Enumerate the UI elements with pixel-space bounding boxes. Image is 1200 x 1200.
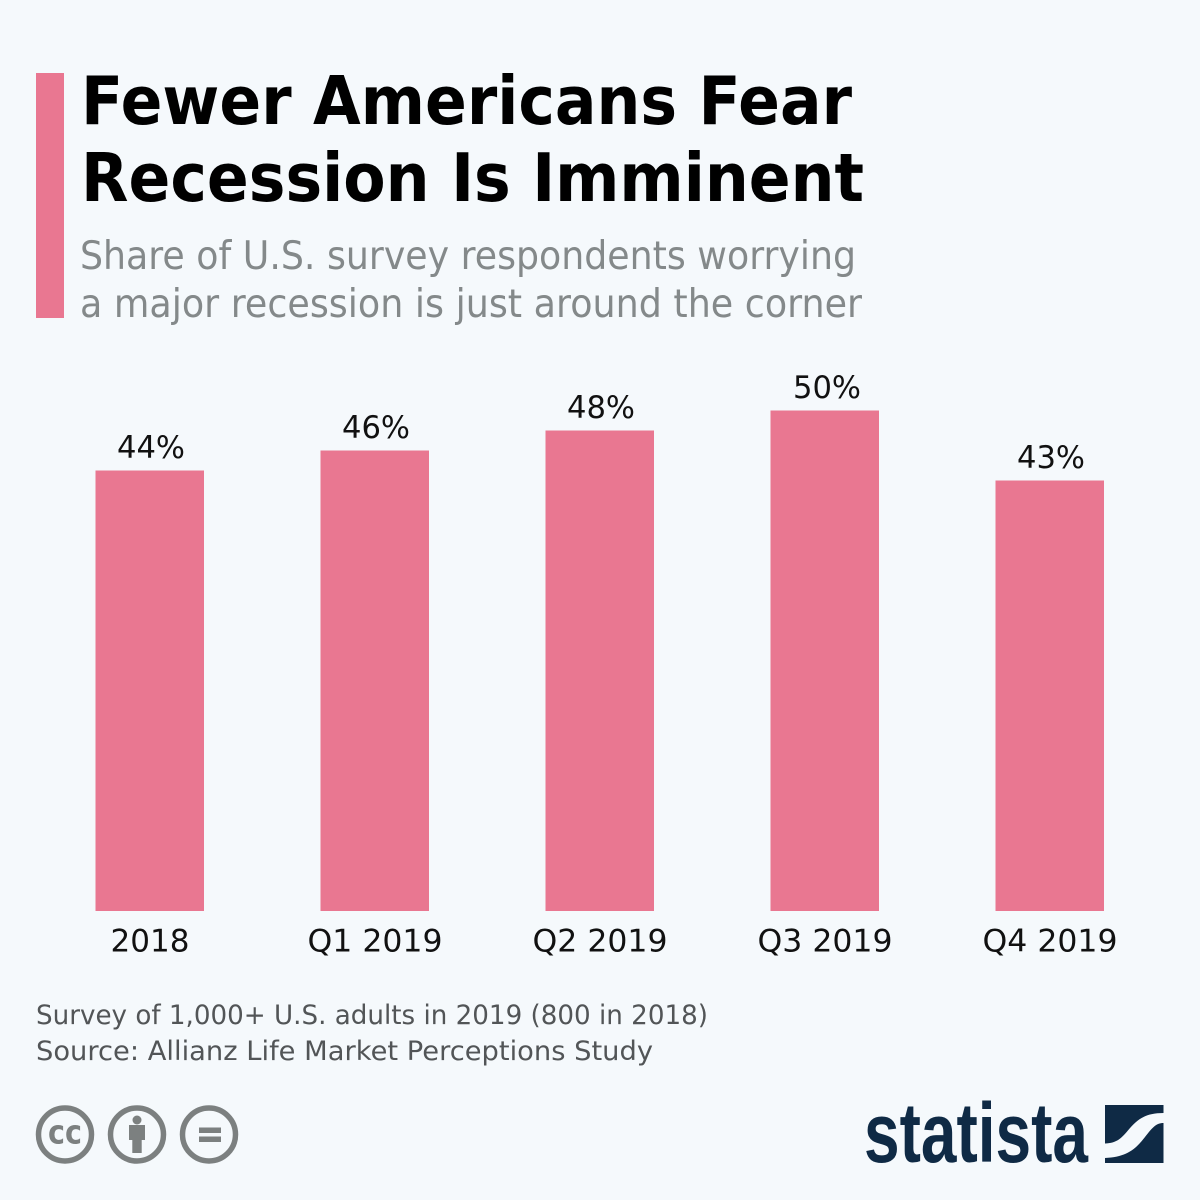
value labels: 44% bbox=[117, 430, 185, 466]
category labels: Q2 2019 bbox=[532, 924, 668, 960]
bar: Q2 2019 bbox=[546, 430, 654, 911]
source note: Source: Allianz Life Market Perceptions Study bbox=[36, 1036, 653, 1067]
bar: 2018 bbox=[96, 470, 204, 911]
source note bbox=[36, 1000, 708, 1067]
category labels: Q1 2019 bbox=[308, 924, 442, 960]
subtitle: a major recession is just around the corner bbox=[80, 282, 863, 327]
icon: no derivatives bbox=[182, 1108, 236, 1161]
icon: creative commons bbox=[38, 1108, 92, 1161]
category labels: Q3 2019 bbox=[758, 924, 892, 960]
title: Fewer Americans Fear bbox=[81, 62, 852, 140]
bar: Q4 2019 bbox=[996, 480, 1104, 911]
icon: statista logo mark bbox=[1105, 1105, 1164, 1163]
value labels: 50% bbox=[793, 370, 861, 406]
bar chart bbox=[96, 370, 1118, 960]
category labels: Q4 2019 bbox=[982, 924, 1118, 960]
icon: creative commons: cc bbox=[48, 1112, 82, 1152]
title accent bar bbox=[36, 73, 64, 318]
bar: Q1 2019 bbox=[320, 450, 429, 911]
bar: Q3 2019 bbox=[770, 410, 879, 911]
statista logo wordmark: statista bbox=[864, 1086, 1089, 1180]
value labels: 48% bbox=[567, 390, 635, 426]
source note: Survey of 1,000+ U.S. adults in 2019 (800 in 2018) bbox=[36, 1000, 708, 1031]
value labels bbox=[117, 370, 1085, 476]
subtitle: Share of U.S. survey respondents worrying bbox=[80, 234, 856, 279]
category labels bbox=[110, 924, 1118, 960]
value labels: 43% bbox=[1017, 440, 1085, 476]
title: Recession Is Imminent bbox=[81, 139, 864, 217]
title bbox=[81, 62, 864, 217]
subtitle bbox=[80, 234, 863, 327]
value labels: 46% bbox=[342, 410, 410, 446]
icon: attribution bbox=[110, 1108, 164, 1161]
category labels: 2018 bbox=[110, 924, 190, 960]
